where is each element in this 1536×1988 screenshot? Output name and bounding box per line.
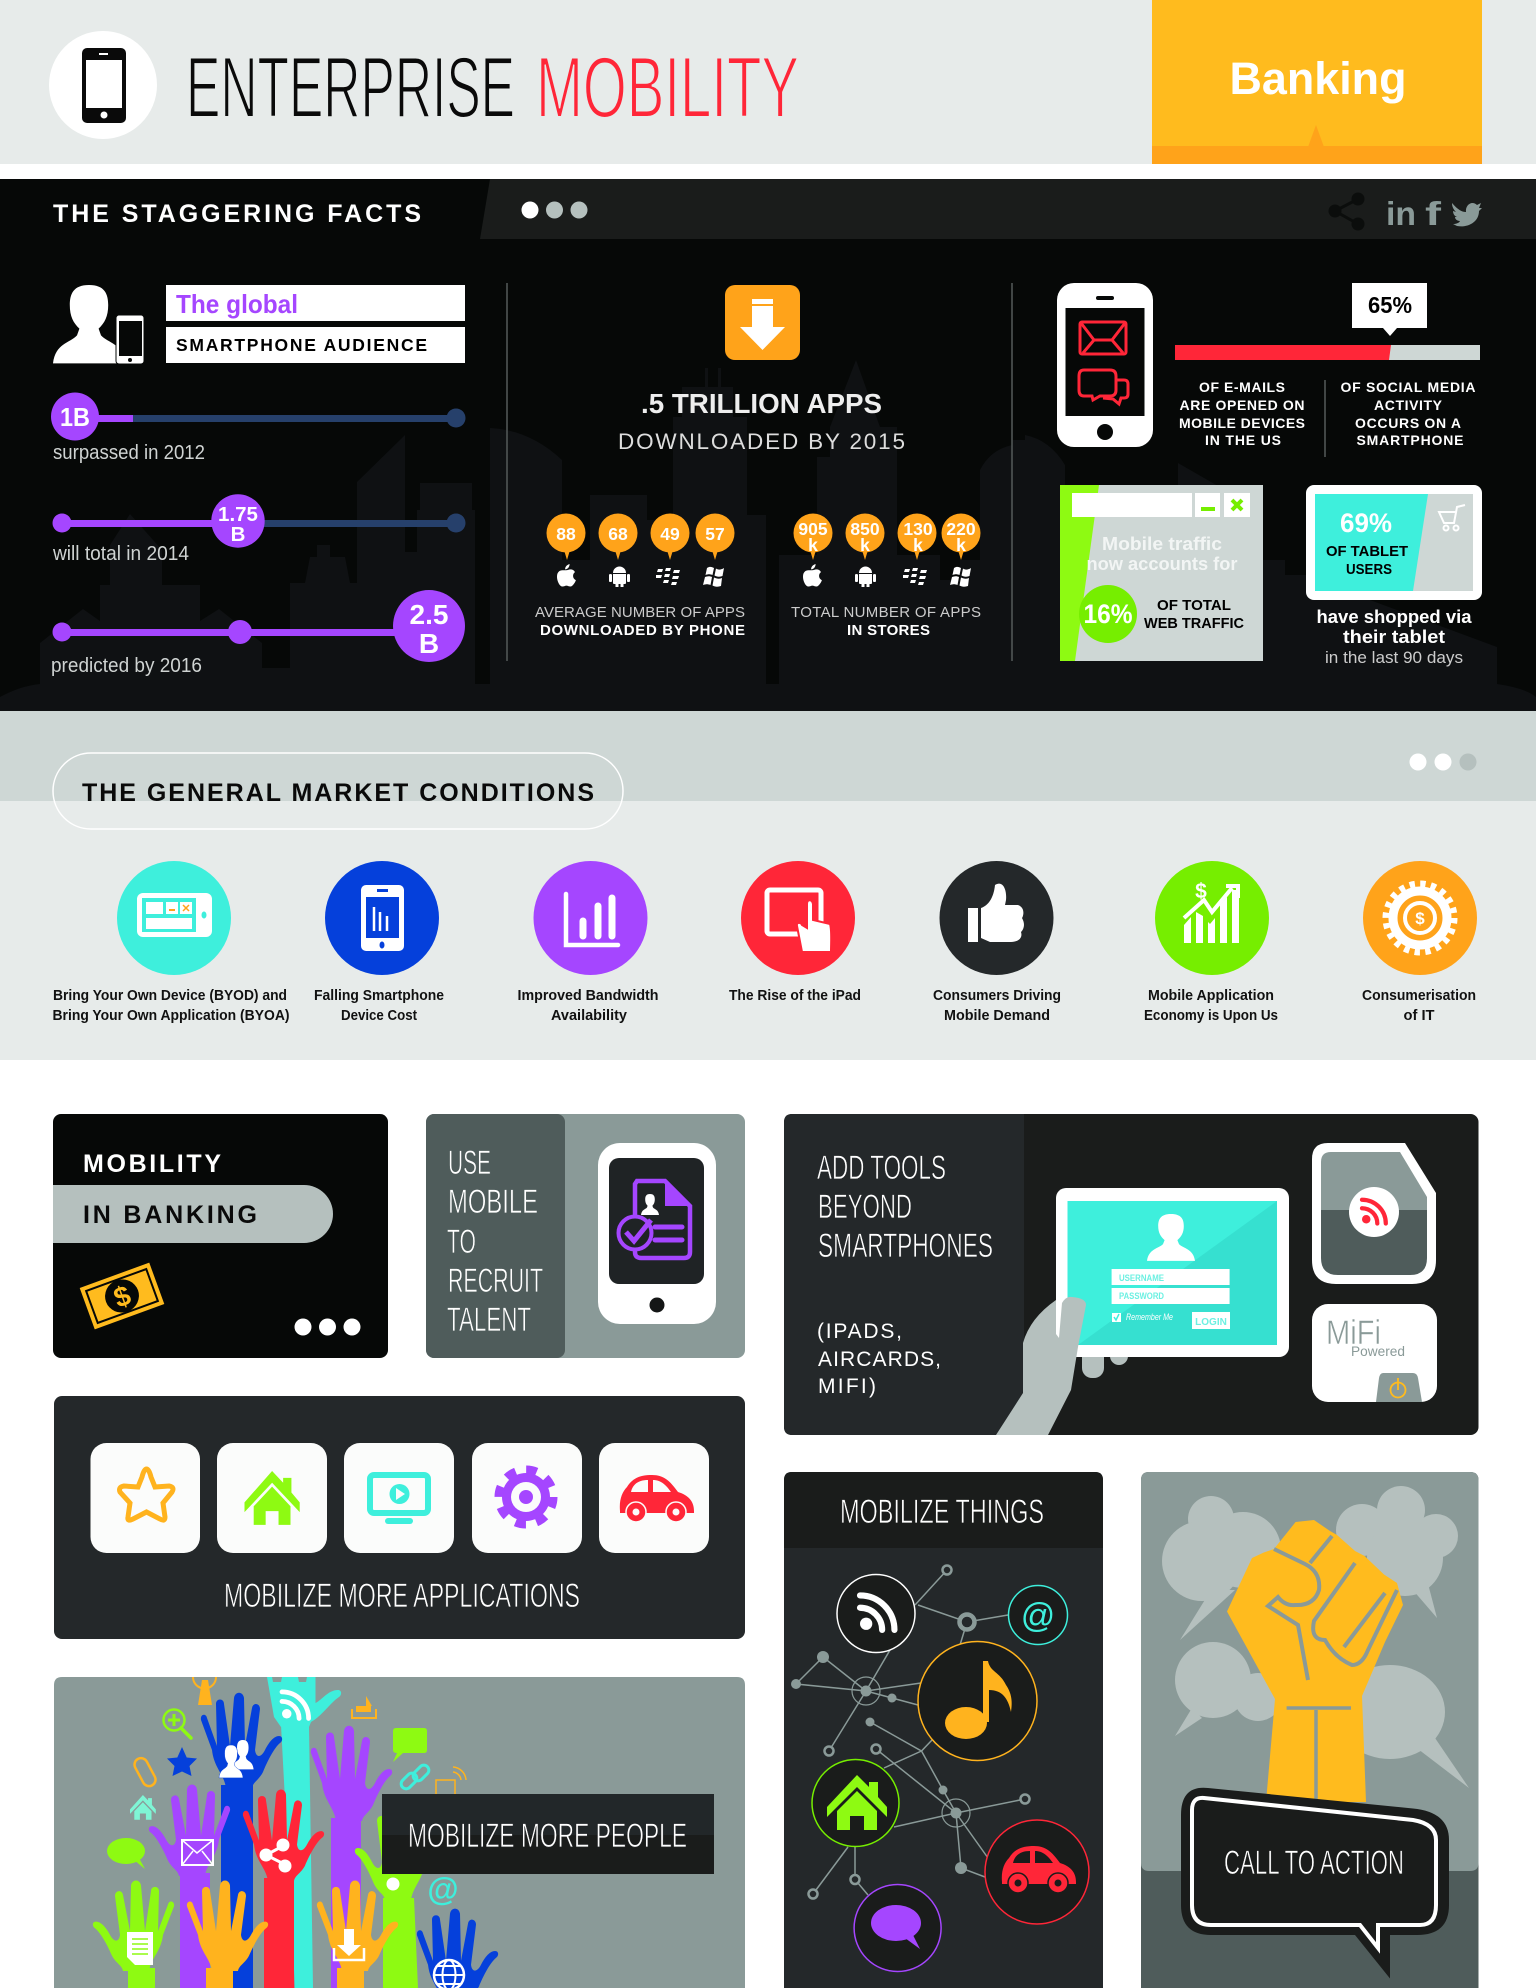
total apps bubbles: 220 (946, 519, 976, 539)
emails caption: OF E-MAILS (1199, 379, 1285, 395)
item: rise of iPad: The Rise of the iPad (729, 988, 861, 1004)
average apps label: DOWNLOADED BY PHONE (540, 622, 745, 639)
total apps bubbles: k (808, 535, 818, 555)
item: device cost (314, 861, 444, 1024)
social caption (1340, 379, 1476, 448)
node: rss (837, 1574, 915, 1652)
tablet shopping caption: their tablet (1343, 626, 1445, 647)
panel: the staggering facts (0, 179, 1536, 711)
slider: 1.75B: 1.75 (218, 503, 258, 526)
block: email and social stats (1057, 283, 1482, 667)
average apps bubbles: 57 (705, 524, 725, 544)
callout bubble (1181, 1788, 1449, 1978)
total apps bubbles: k (956, 535, 966, 555)
node: chat (854, 1884, 941, 1972)
total apps bubbles: k (913, 535, 923, 555)
card: add tools beyond smartphones: AIRCARDS, (818, 1348, 941, 1371)
item: consumers: Consumers Driving (933, 988, 1061, 1004)
node: at sign (1008, 1586, 1068, 1644)
icon: monitor tile (344, 1443, 454, 1553)
floating icons (107, 1677, 466, 1907)
subheadline: DOWNLOADED BY 2015 (618, 429, 905, 454)
average apps bubbles: 68 (608, 524, 628, 544)
card: mobility in banking: MOBILITY (83, 1150, 221, 1178)
slider: 1B: surpassed in 2012 (53, 442, 205, 464)
item: consumerisation: of IT (1404, 1008, 1435, 1024)
icon: sim card (1312, 1143, 1436, 1284)
node: at sign: @ (1021, 1597, 1055, 1635)
emails caption (1179, 379, 1305, 448)
pagination dots (294, 1318, 360, 1336)
icon: login tablet (1056, 1188, 1289, 1357)
icon: mifi device (1312, 1304, 1437, 1402)
item: device cost: Device Cost (341, 1008, 417, 1024)
slider: 2.5B: B (419, 628, 439, 659)
tablet shopping caption: have shopped via (1316, 606, 1472, 627)
panel: web traffic window: now accounts for (1086, 553, 1238, 574)
card: use mobile to recruit talent: TO (447, 1223, 476, 1261)
item: device cost: Falling Smartphone (314, 988, 444, 1004)
skyline silhouette (0, 360, 1536, 711)
slider: 1.75B: will total in 2014 (52, 543, 189, 565)
speech clouds (1162, 1486, 1469, 1788)
social caption: SMARTPHONE (1356, 432, 1464, 448)
item: bandwidth: Availability (551, 1008, 627, 1024)
average apps bubbles (546, 514, 734, 587)
item: app economy (1144, 861, 1278, 1024)
icon: raised fist (1227, 1520, 1403, 1802)
panel: web traffic window: OF TOTAL (1157, 597, 1231, 614)
card: mobilize things (784, 1472, 1103, 1988)
icon: person with phone (53, 285, 144, 364)
title: MOBILITY (536, 40, 799, 136)
title: ENTERPRISE (186, 40, 515, 136)
slider: 1B (51, 392, 466, 464)
card: use mobile to recruit talent: USE (448, 1144, 491, 1182)
icon: login tablet: Remember Me (1126, 1312, 1173, 1322)
icon: mifi device: Powered (1351, 1343, 1405, 1359)
emails caption: IN THE US (1205, 432, 1281, 448)
card: mobilize things: MOBILIZE THINGS (840, 1493, 1044, 1531)
title bar (0, 179, 1536, 239)
block: smartphone audience (51, 285, 466, 677)
panel: tablet shopping: USERS (1346, 561, 1392, 578)
icon: phone in circle (49, 31, 157, 139)
item: app economy: Economy is Upon Us (1144, 1008, 1278, 1024)
average apps bubbles: 49 (660, 524, 680, 544)
card: mobility in banking (53, 1114, 388, 1358)
item: BYOD: Bring Your Own Application (BYOA) (52, 1008, 290, 1024)
social caption: ACTIVITY (1374, 397, 1443, 413)
panel: general market conditions (0, 711, 1536, 1060)
icon: phone with resume (598, 1143, 716, 1324)
icon: download (725, 285, 800, 360)
card: add tools beyond smartphones (784, 1114, 1478, 1435)
pagination dots (1410, 754, 1476, 770)
label: smartphone audience (166, 327, 465, 363)
item: app economy: $ (1195, 880, 1207, 903)
panel: web traffic window: Mobile traffic (1102, 533, 1222, 554)
banking tab (1152, 0, 1482, 164)
icon: gear tile (472, 1443, 582, 1553)
total apps bubbles: 850 (850, 519, 880, 539)
item: rise of iPad (729, 861, 861, 1004)
emails caption: MOBILE DEVICES (1179, 415, 1305, 431)
social icons: f (1425, 195, 1442, 232)
social caption: OF SOCIAL MEDIA (1340, 379, 1476, 395)
total apps bubbles: 130 (903, 519, 933, 539)
title bar: THE STAGGERING FACTS (53, 200, 421, 228)
label: the global: The global (176, 289, 298, 319)
total apps bubbles (794, 514, 980, 587)
node: home (812, 1760, 899, 1846)
icon: login tablet: LOGIN (1195, 1317, 1227, 1328)
slider: 1B: 1B (60, 402, 90, 432)
node: car (985, 1820, 1089, 1924)
total apps label (791, 604, 981, 639)
icon: cart (1439, 505, 1465, 530)
tablet shopping caption (1316, 606, 1472, 667)
average apps label: AVERAGE NUMBER OF APPS (535, 604, 745, 621)
item: BYOD: Bring Your Own Device (BYOD) and (53, 988, 287, 1004)
icon: star tile (90, 1443, 200, 1553)
total apps bubbles: k (860, 535, 870, 555)
total apps label: TOTAL NUMBER OF APPS (791, 604, 981, 621)
card: add tools beyond smartphones: SMARTPHONES (818, 1227, 993, 1265)
card: call to action (1141, 1472, 1478, 1988)
dividers (507, 283, 1012, 661)
icon: phone with mail and chat (1057, 283, 1153, 447)
item: consumers: Mobile Demand (944, 1008, 1050, 1024)
icon: holding hand (996, 1297, 1086, 1435)
panel: web traffic window: 16% (1084, 599, 1132, 629)
item: consumerisation: $ (1415, 909, 1425, 928)
item: bandwidth: Improved Bandwidth (518, 988, 658, 1004)
total apps label: IN STORES (847, 622, 930, 639)
node: music (918, 1642, 1037, 1760)
card: use mobile to recruit talent: RECRUIT (448, 1262, 543, 1300)
slider: 2.5B (51, 590, 465, 677)
item: consumerisation (1362, 861, 1477, 1024)
card: use mobile to recruit talent: MOBILE (448, 1183, 538, 1221)
raised hands (93, 1677, 498, 1988)
banking tab: Banking (1230, 53, 1406, 104)
card: use mobile to recruit talent (426, 1114, 745, 1358)
icon: login tablet: USERNAME (1119, 1273, 1164, 1284)
social icons: in (1386, 195, 1416, 232)
social caption: OCCURS ON A (1355, 415, 1461, 431)
panel: web traffic window (1060, 485, 1263, 661)
network lines (791, 1566, 1030, 1898)
average apps bubbles: 88 (556, 524, 576, 544)
icon: mifi device: MiFi (1326, 1314, 1381, 1352)
people label (382, 1794, 714, 1874)
item: consumers (933, 861, 1061, 1024)
label: smartphone audience: SMARTPHONE AUDIENCE (176, 335, 427, 355)
slider: 2.5B: predicted by 2016 (51, 655, 202, 677)
panel: tablet shopping (1306, 485, 1482, 600)
headline: .5 TRILLION APPS (641, 388, 882, 419)
icon: banknote (80, 1263, 164, 1329)
tablet shopping caption: in the last 90 days (1325, 648, 1463, 667)
icon: car tile (599, 1443, 709, 1553)
card: mobilize more applications (54, 1396, 745, 1639)
panel: tablet shopping: 69% (1340, 508, 1392, 538)
pagination dots (522, 202, 588, 218)
people label: MOBILIZE MORE PEOPLE (408, 1817, 687, 1855)
in banking pill: IN BANKING (83, 1201, 257, 1229)
in banking pill (53, 1185, 333, 1243)
card: use mobile to recruit talent: TALENT (447, 1301, 531, 1339)
card: mobilize more applications: MOBILIZE MORE APPLICATIONS (224, 1577, 580, 1615)
palm icons (127, 1692, 464, 1988)
progress bar 65 percent: 65% (1368, 292, 1412, 318)
social icons (1328, 192, 1482, 232)
item: app economy: Mobile Application (1148, 988, 1274, 1004)
emails caption: ARE OPENED ON (1180, 397, 1304, 413)
icon: login tablet: PASSWORD (1119, 1291, 1164, 1302)
slider: 1.75B (52, 494, 465, 565)
floating icons: @ (427, 1871, 459, 1907)
header band (0, 0, 1536, 164)
icon: banknote: $ (110, 1279, 135, 1314)
icon: house tile (217, 1443, 327, 1553)
label: the global (166, 285, 465, 321)
item: consumerisation: Consumerisation (1362, 988, 1476, 1004)
item: bandwidth (518, 861, 658, 1024)
icon: fingers behind tablet (1082, 1345, 1128, 1378)
heading pill (53, 753, 623, 829)
item: BYOD (52, 861, 290, 1024)
block: trillion apps (535, 285, 981, 639)
card: add tools beyond smartphones: MIFI) (818, 1375, 876, 1398)
card: add tools beyond smartphones: (IPADS, (817, 1320, 902, 1343)
progress bar 65 percent (1175, 283, 1480, 360)
panel: web traffic window: WEB TRAFFIC (1144, 615, 1244, 632)
heading pill: THE GENERAL MARKET CONDITIONS (82, 779, 594, 807)
card: add tools beyond smartphones: ADD TOOLS (817, 1149, 946, 1187)
panel: tablet shopping: OF TABLET (1326, 543, 1408, 560)
slider: 2.5B: 2.5 (410, 599, 448, 630)
average apps label (535, 604, 745, 639)
total apps bubbles: 905 (798, 519, 828, 539)
card: mobilize more people (54, 1677, 745, 1988)
callout bubble: CALL TO ACTION (1224, 1844, 1404, 1882)
card: add tools beyond smartphones: BEYOND (818, 1188, 912, 1226)
slider: 1.75B: B (231, 523, 245, 546)
